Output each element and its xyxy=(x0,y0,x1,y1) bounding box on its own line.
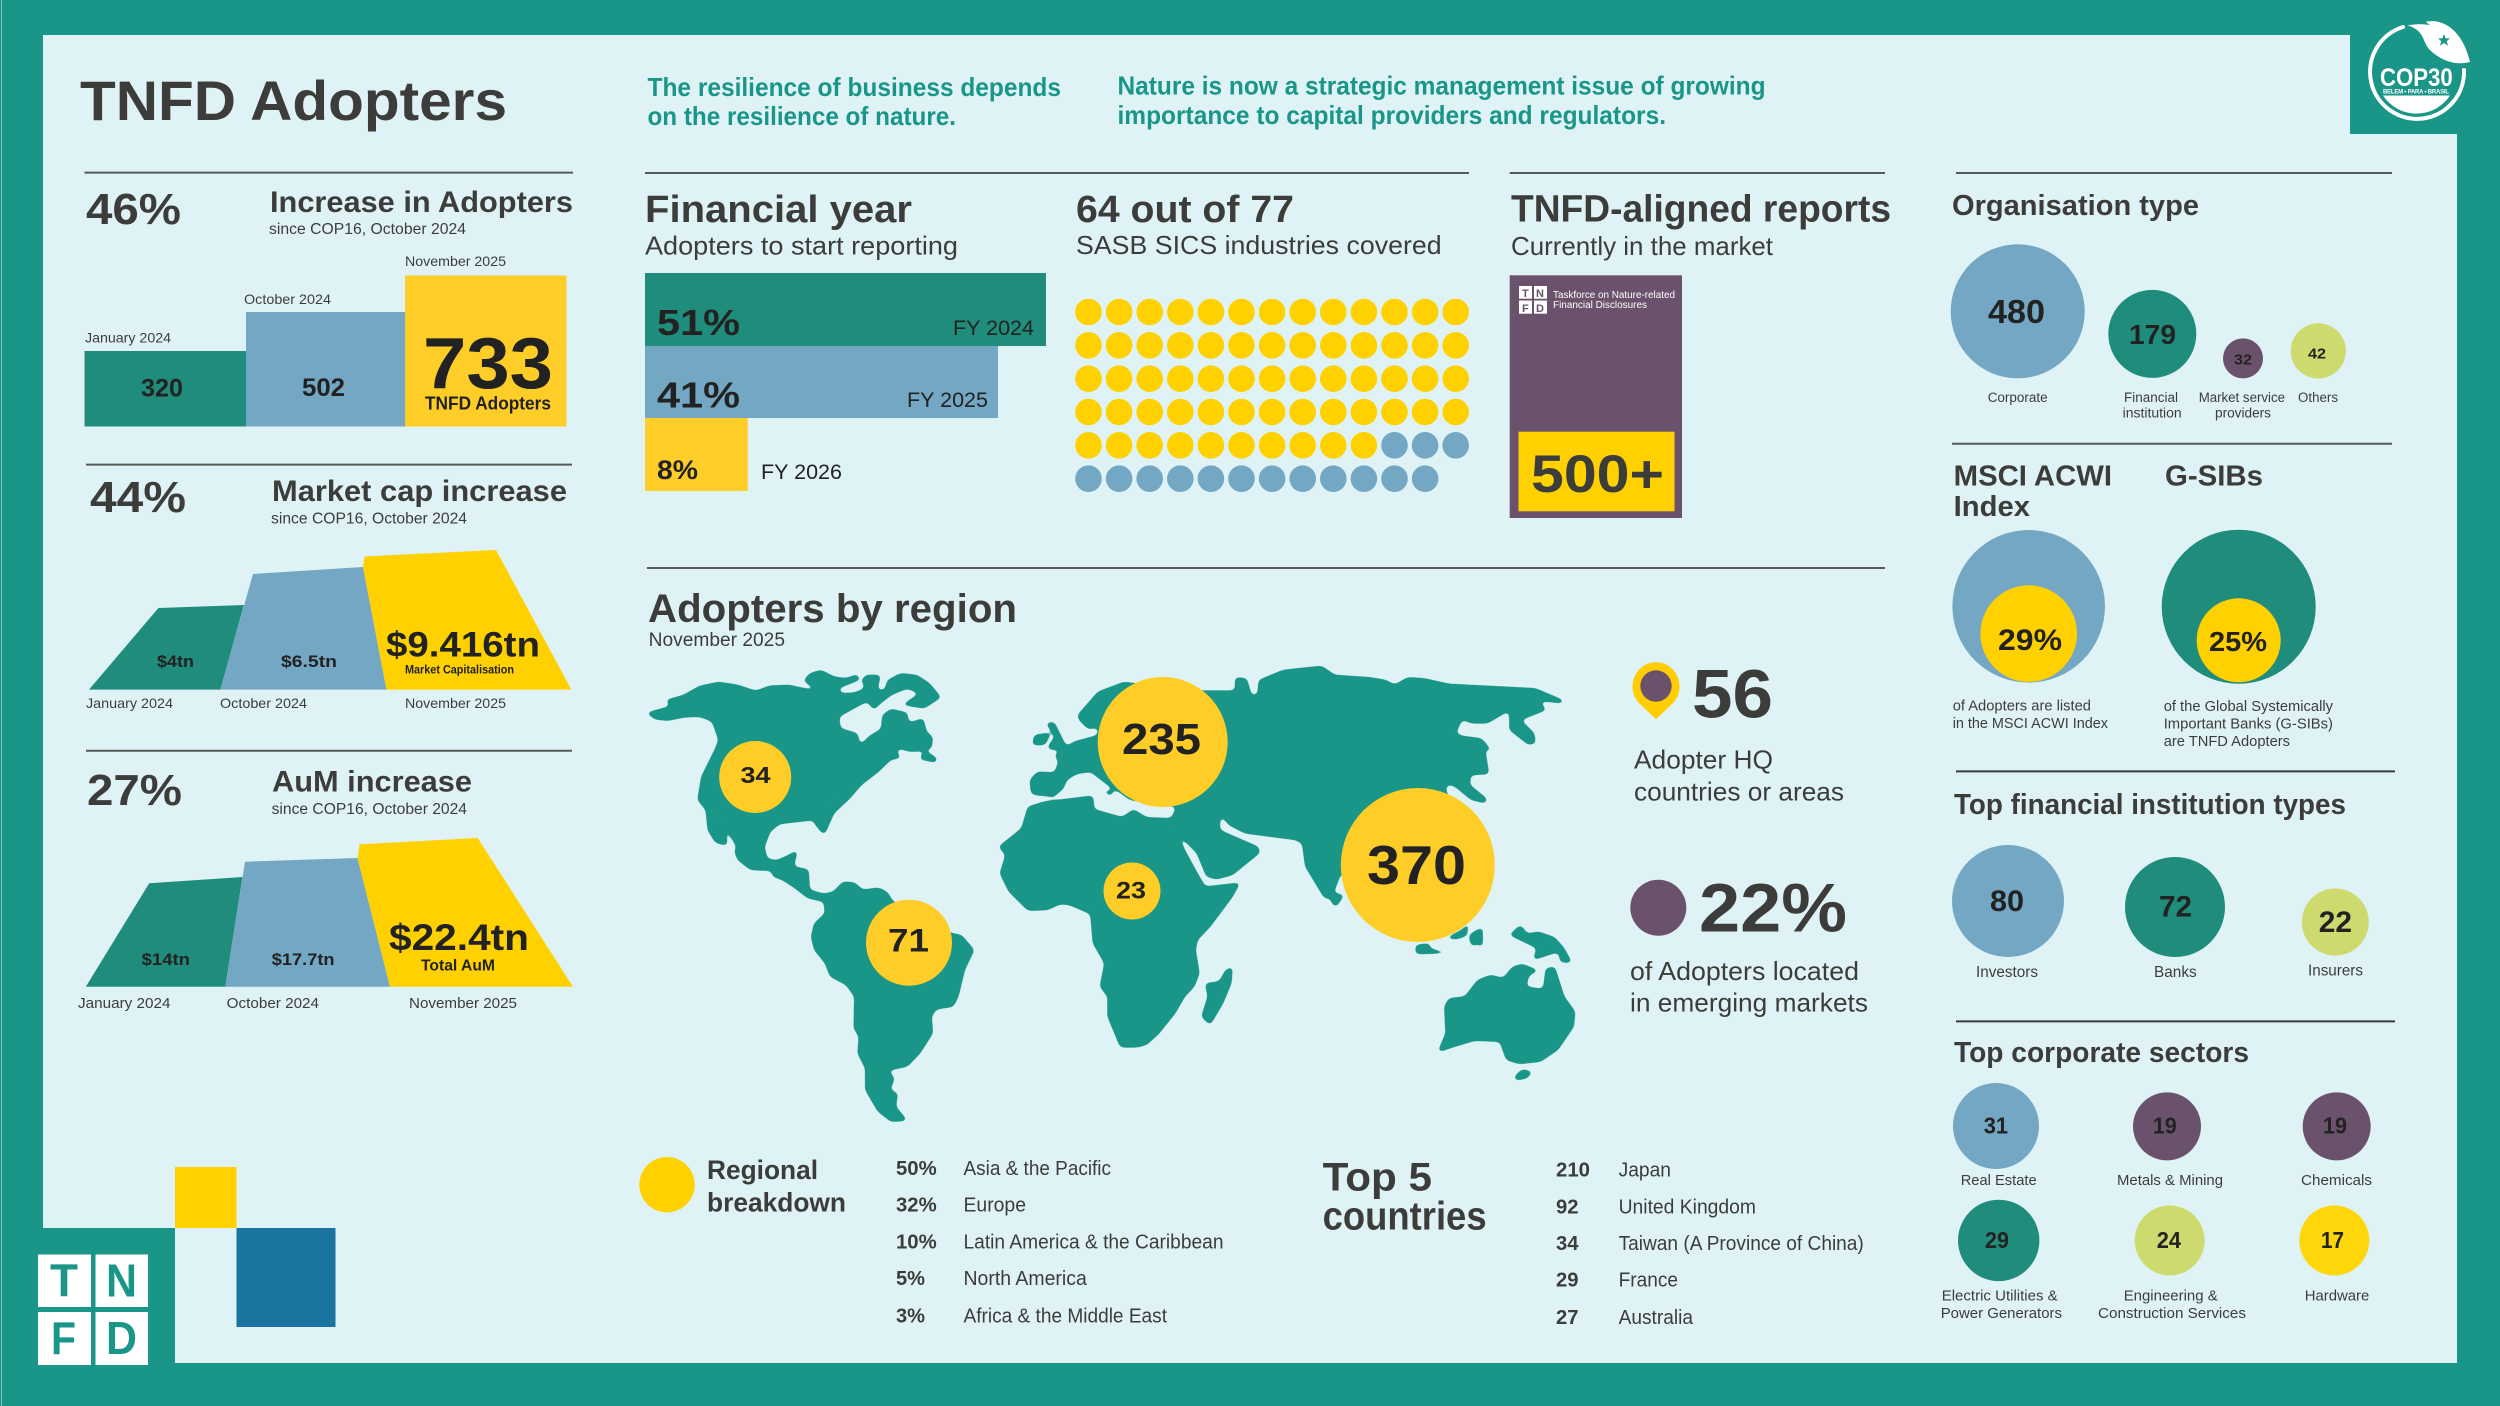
bar chart: adopters xyxy=(84,253,566,426)
area chart: market cap: October 2024 xyxy=(220,695,307,711)
bubble: Europe 235 xyxy=(1098,677,1228,807)
bubble: Latin America 71 xyxy=(866,900,952,986)
area chart: AuM: $22.4tn xyxy=(389,917,529,958)
heading: Increase in Adopters xyxy=(270,186,573,219)
stat: 44%: 44% xyxy=(90,473,186,522)
heading: AuM increase xyxy=(272,766,472,799)
logo: TNFD: D xyxy=(106,1312,137,1364)
regional breakdown: Africa & the Middle East xyxy=(964,1305,1167,1327)
stat: 46%: 46% xyxy=(86,185,181,234)
bubble: banks: Banks xyxy=(2154,964,2197,981)
top 5 countries: 29 xyxy=(1556,1270,1578,1292)
logo: TNFD: T xyxy=(50,1255,78,1307)
top 5 countries: 27 xyxy=(1556,1307,1578,1329)
bubble: market service providers xyxy=(2199,338,2285,421)
caption: MSCI: of Adopters are listed xyxy=(1953,698,2091,715)
area chart: AuM: $17.7tn xyxy=(272,950,334,969)
tagline: resilience: on the resilience of nature. xyxy=(648,101,956,131)
area chart: market cap: $9.416tn xyxy=(386,626,540,664)
bubble: North America 34: 34 xyxy=(740,762,771,788)
stat: HQ countries: Adopter HQ xyxy=(1634,744,1773,774)
bubble: insurers xyxy=(2302,888,2369,980)
subheading: SASB SICS industries covered xyxy=(1076,230,1442,260)
title: TNFD Adopters xyxy=(80,69,507,132)
bar chart: adopters: January 2024 xyxy=(85,330,171,346)
panel: MSCI ACWI Index and G-SIBs xyxy=(1952,444,2392,750)
regional breakdown: Regional xyxy=(707,1155,818,1185)
caption: G-SIBs: of the Global Systemically xyxy=(2164,698,2333,715)
bubble: Africa 23 xyxy=(1104,862,1160,920)
top 5 countries: Taiwan (A Province of China) xyxy=(1619,1233,1864,1255)
top 5 countries: Top 5 xyxy=(1323,1156,1432,1200)
bar chart: reporting year: FY 2024 xyxy=(953,317,1034,340)
bubble: corporate: 480 xyxy=(1988,293,2045,330)
bubble: engineering and construction: Engineering & xyxy=(2124,1287,2218,1304)
panel: top corporate sectors xyxy=(1941,1021,2395,1322)
heading: Top corporate sectors xyxy=(1954,1037,2249,1069)
area chart: market cap: $6.5tn xyxy=(281,652,337,671)
bar chart: reporting year xyxy=(645,273,1046,491)
top 5 countries: France xyxy=(1619,1270,1678,1292)
panel: AuM increase xyxy=(78,751,573,1012)
logo: COP30: COP30 xyxy=(2380,64,2453,92)
tagline: strategic issue: importance to capital providers and regulators. xyxy=(1118,100,1666,130)
bar chart: reporting year: FY 2025 xyxy=(907,389,988,412)
world map xyxy=(647,666,1575,1122)
stat: emerging markets: of Adopters located xyxy=(1630,956,1859,986)
bar chart: adopters: 733 xyxy=(423,324,553,404)
caption: G-SIBs xyxy=(2164,698,2333,750)
regional breakdown: North America xyxy=(964,1268,1088,1290)
bubble: electric utilities: 29 xyxy=(1985,1227,2009,1253)
nested bubble: MSCI 29%: 29% xyxy=(1998,624,2062,657)
regional breakdown: 32% xyxy=(896,1195,937,1217)
nested bubble: G-SIBs 25% xyxy=(2162,530,2316,684)
report cover: D xyxy=(1536,303,1544,315)
subheading: Adopters to start reporting xyxy=(645,230,958,260)
heading: MSCI ACWI Index xyxy=(1954,460,2112,523)
heading: Market cap increase xyxy=(272,475,567,508)
regional breakdown: Asia & the Pacific xyxy=(964,1158,1111,1180)
area chart: AuM: $14tn xyxy=(142,950,190,969)
caption: MSCI xyxy=(1953,698,2108,732)
bubble: metals and mining: 19 xyxy=(2153,1113,2177,1139)
bubble: financial institution xyxy=(2108,290,2196,421)
bubble: financial institution: institution xyxy=(2123,406,2182,421)
subheading: since COP16, October 2024 xyxy=(271,510,467,527)
logo: TNFD xyxy=(38,1254,148,1365)
bubble: market service providers: 32 xyxy=(2234,352,2252,369)
regional breakdown: 5% xyxy=(896,1268,925,1290)
bubble: financial institution: 179 xyxy=(2129,319,2176,350)
bubble: financial institution: Financial xyxy=(2124,390,2178,405)
heading: MSCI ACWI Index: Index xyxy=(1954,491,2030,523)
report cover: T xyxy=(1522,288,1529,300)
top 5 countries: 92 xyxy=(1556,1196,1578,1218)
subheading: November 2025 xyxy=(649,630,785,651)
bubble: corporate xyxy=(1951,244,2085,405)
logo: TNFD: F xyxy=(51,1312,76,1364)
top 5 countries: 34 xyxy=(1556,1233,1579,1255)
bar chart: adopters: 320 xyxy=(141,375,183,403)
top 5 countries: United Kingdom xyxy=(1619,1196,1756,1218)
bubble: others: Others xyxy=(2298,390,2338,405)
panel: organisation type xyxy=(1951,173,2392,421)
tagline: strategic issue: Nature is now a strategic management issue of growing xyxy=(1118,70,1766,100)
bar chart: reporting year: 51% xyxy=(657,302,740,343)
bubble: electric utilities: Power Generators xyxy=(1941,1305,2062,1322)
bubble: market service providers: providers xyxy=(2215,406,2271,421)
bubble: chemicals: Chemicals xyxy=(2301,1172,2372,1189)
top 5 countries xyxy=(1323,1156,1864,1329)
panel: increase in adopters xyxy=(84,173,573,426)
regional breakdown: 50% xyxy=(896,1158,937,1180)
tagline: strategic issue xyxy=(1118,70,1766,130)
bar chart: adopters: TNFD Adopters xyxy=(425,392,551,414)
heading: Adopters by region xyxy=(648,587,1017,631)
bubble: real estate: Real Estate xyxy=(1961,1172,2037,1189)
tagline: resilience xyxy=(648,72,1061,131)
area chart: market cap: $4tn xyxy=(157,652,194,671)
regional breakdown: breakdown xyxy=(707,1188,846,1218)
bubble: corporate: Corporate xyxy=(1988,390,2048,405)
stat: emerging markets: in emerging markets xyxy=(1630,988,1868,1018)
bubble: chemicals: 19 xyxy=(2323,1113,2347,1139)
bubble: real estate: 31 xyxy=(1984,1113,2008,1139)
heading: MSCI ACWI Index: MSCI ACWI xyxy=(1954,460,2112,492)
report cover: 500+ xyxy=(1531,445,1664,504)
bubble: engineering and construction: Construction Services xyxy=(2098,1305,2246,1322)
bar chart: adopters: October 2024 xyxy=(244,291,331,307)
bubble: banks xyxy=(2125,857,2225,981)
bar chart: reporting year: 41% xyxy=(657,375,740,416)
bubble: hardware: 17 xyxy=(2321,1227,2344,1253)
subheading: since COP16, October 2024 xyxy=(272,801,467,818)
regional breakdown: 3% xyxy=(896,1305,925,1327)
panel: adopters by region xyxy=(639,568,1885,1329)
bar chart: reporting year: FY 2026 xyxy=(761,461,842,484)
bubble: Africa 23: 23 xyxy=(1116,878,1146,905)
bar chart: reporting year: 8% xyxy=(657,455,698,485)
tagline: resilience: The resilience of business depends xyxy=(648,72,1061,102)
bubble: Asia Pacific 370: 370 xyxy=(1367,834,1466,896)
top 5 countries: Australia xyxy=(1619,1307,1694,1329)
bubble: chemicals xyxy=(2301,1092,2372,1189)
heading: Top financial institution types xyxy=(1954,789,2346,821)
area chart: AuM: Total AuM xyxy=(421,958,495,975)
panel: market cap increase xyxy=(86,465,572,711)
area chart: market cap: November 2025 xyxy=(405,695,506,711)
caption: G-SIBs: are TNFD Adopters xyxy=(2164,733,2290,750)
regional breakdown: 10% xyxy=(896,1231,937,1253)
logo: TNFD: N xyxy=(106,1255,137,1307)
subheading: Currently in the market xyxy=(1511,231,1774,261)
bubble: banks: 72 xyxy=(2159,890,2192,923)
area chart: market cap xyxy=(86,550,571,711)
top 5 countries: countries xyxy=(1323,1194,1487,1238)
bar chart: adopters: November 2025 xyxy=(405,253,506,269)
panel: TNFD-aligned reports xyxy=(1510,173,1891,518)
report cover: N xyxy=(1536,288,1544,300)
heading: 64 out of 77 xyxy=(1076,189,1294,231)
report cover: Taskforce on Nature-related xyxy=(1553,290,1675,301)
bubble: hardware xyxy=(2299,1205,2369,1304)
bubble: North America 34 xyxy=(719,741,791,813)
bubble: investors: 80 xyxy=(1990,885,2024,918)
report cover: F xyxy=(1522,303,1529,315)
bubble: insurers: Insurers xyxy=(2308,963,2363,980)
subheading: since COP16, October 2024 xyxy=(269,221,466,238)
bubble: insurers: 22 xyxy=(2319,906,2352,939)
bubble: market service providers: Market service xyxy=(2199,390,2285,405)
bubble: Europe 235: 235 xyxy=(1122,715,1201,764)
bubble: engineering and construction xyxy=(2098,1205,2246,1322)
nested bubble: MSCI 29% xyxy=(1952,530,2105,683)
panel: financial year xyxy=(645,173,1469,491)
caption: G-SIBs: Important Banks (G-SIBs) xyxy=(2164,716,2333,732)
icon: map pin xyxy=(1633,662,1679,719)
top 5 countries: 210 xyxy=(1556,1160,1590,1182)
heading: Organisation type xyxy=(1952,190,2199,222)
area chart: AuM xyxy=(78,838,573,1012)
stat: emerging markets xyxy=(1630,870,1868,1018)
top 5 countries: Japan xyxy=(1619,1160,1671,1182)
bubble: investors: Investors xyxy=(1976,964,2038,981)
regional breakdown: Europe xyxy=(964,1195,1026,1217)
heading: G-SIBs: G-SIBs xyxy=(2165,460,2263,492)
bubble: others xyxy=(2291,323,2346,405)
heading: TNFD-aligned reports xyxy=(1511,188,1891,230)
stat: HQ countries: countries or areas xyxy=(1634,777,1844,807)
stat: emerging markets: 22% xyxy=(1699,870,1847,947)
bubble: electric utilities xyxy=(1941,1200,2062,1322)
bubble: real estate xyxy=(1953,1083,2039,1189)
bubble: Latin America 71: 71 xyxy=(888,923,929,959)
bubble: investors xyxy=(1952,845,2064,981)
nested bubble: G-SIBs 25%: 25% xyxy=(2209,626,2267,657)
area chart: market cap: January 2024 xyxy=(86,695,173,711)
decorative squares and TNFD logo xyxy=(38,1167,336,1365)
bubble: engineering and construction: 24 xyxy=(2157,1227,2181,1253)
area chart: AuM: October 2024 xyxy=(227,995,319,1012)
area chart: AuM: January 2024 xyxy=(78,995,170,1012)
bar chart: adopters: 502 xyxy=(302,374,345,402)
report cover xyxy=(1510,275,1682,518)
stat: HQ countries: 56 xyxy=(1692,655,1773,732)
bubble: hardware: Hardware xyxy=(2305,1287,2369,1304)
logo: COP30 xyxy=(2370,21,2470,119)
stat: HQ countries xyxy=(1633,655,1844,807)
logo: COP30: BELEM • PARA • BRASIL xyxy=(2383,89,2449,95)
panel: industries covered xyxy=(1075,189,1469,492)
bubble: Asia Pacific 370 xyxy=(1341,788,1495,942)
report cover: Financial Disclosures xyxy=(1553,300,1647,311)
bubble: others: 42 xyxy=(2308,345,2326,362)
bubble: metals and mining: Metals & Mining xyxy=(2117,1172,2223,1189)
stat: 27%: 27% xyxy=(87,766,182,815)
regional breakdown: Latin America & the Caribbean xyxy=(964,1231,1224,1253)
bubble: electric utilities: Electric Utilities & xyxy=(1942,1287,2058,1304)
area chart: market cap: Market Capitalisation xyxy=(405,662,514,676)
regional breakdown xyxy=(639,1155,1224,1327)
bubble: metals and mining xyxy=(2117,1092,2223,1189)
panel: top financial institution types xyxy=(1952,771,2395,981)
area chart: AuM: November 2025 xyxy=(409,995,517,1012)
caption: MSCI: in the MSCI ACWI Index xyxy=(1953,715,2108,732)
heading: Financial year xyxy=(645,189,912,231)
dot grid: industries xyxy=(1075,299,1469,492)
